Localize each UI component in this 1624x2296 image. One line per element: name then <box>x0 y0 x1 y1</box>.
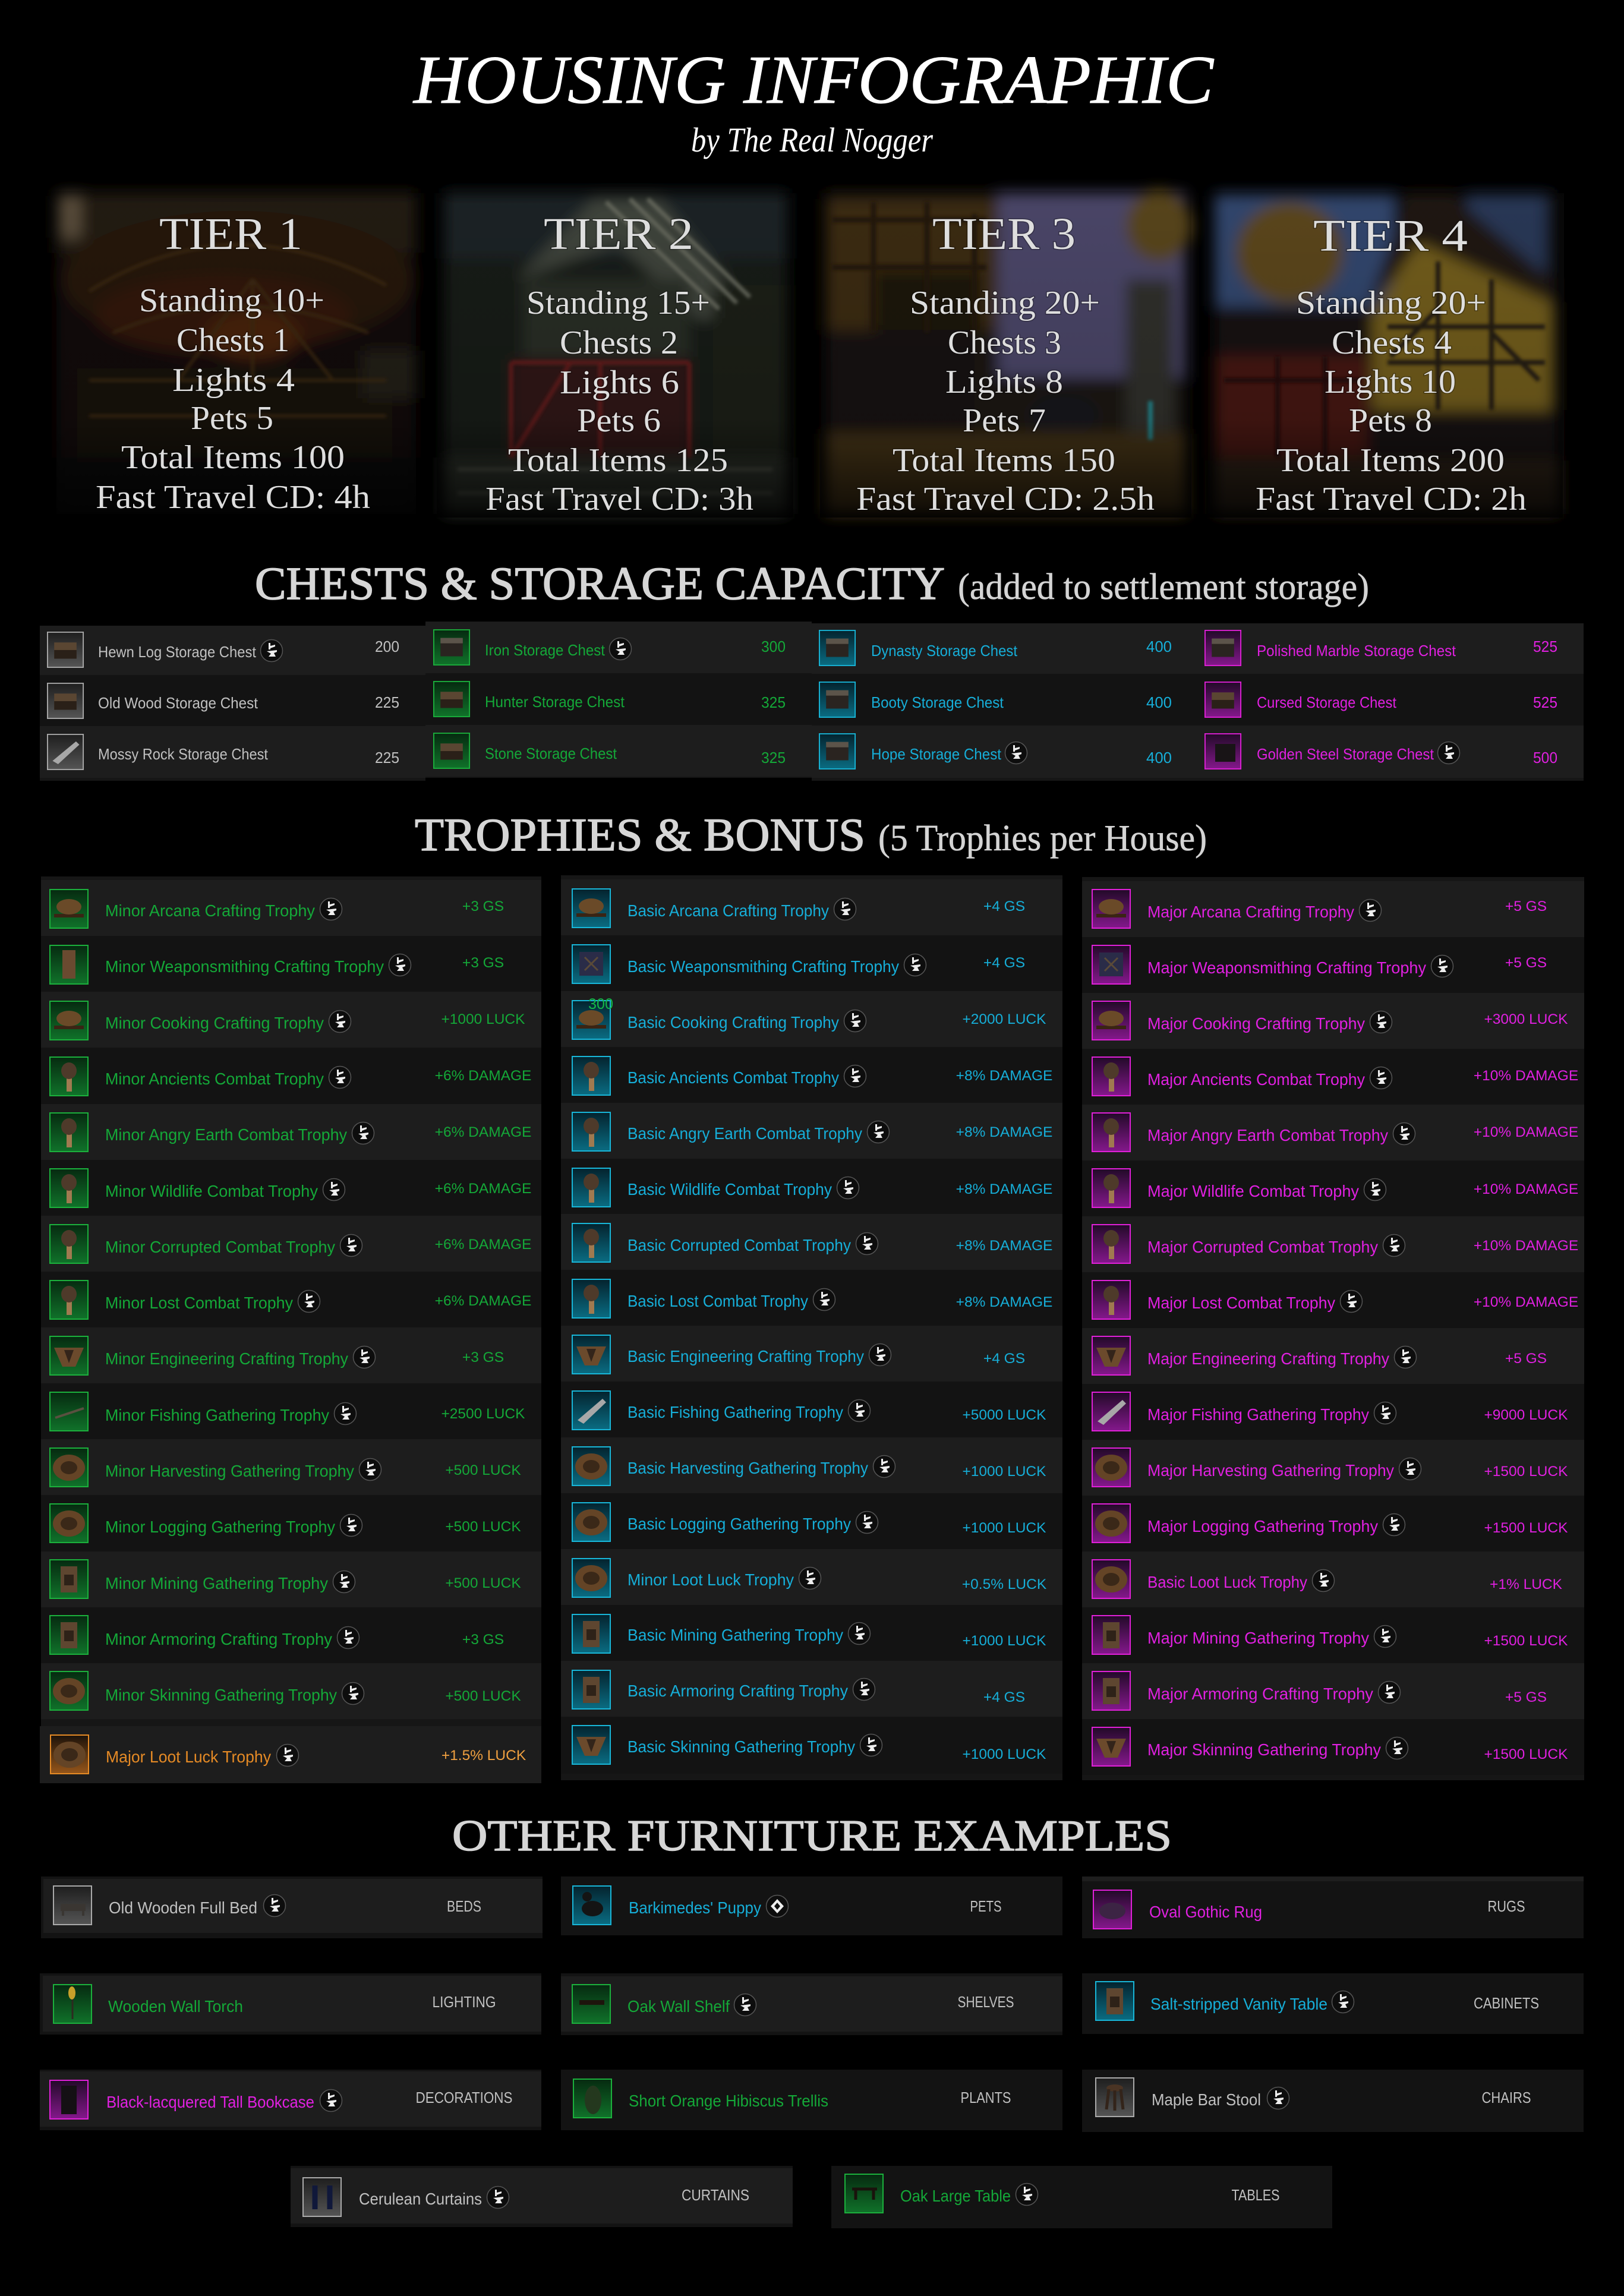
trophy: Minor Ancients <box>41 1048 541 1104</box>
trophy: Minor Wildlife: +6% DAMAGE <box>435 1181 531 1197</box>
tier 2 text <box>485 209 753 518</box>
trophy: Major Skinning: Major Skinning Gathering Trophy <box>1147 1740 1381 1759</box>
furniture: pets: PETS <box>970 1897 1002 1915</box>
tier 3 text: Fast Travel CD: 2.5h <box>856 481 1155 518</box>
heading: trophies and bonus <box>415 809 1207 860</box>
trophy: Basic Wildlife: Basic Wildlife Combat Trophy <box>627 1180 832 1199</box>
tier 2 text: Fast Travel CD: 3h <box>485 481 753 518</box>
trophy: Minor Corrupted: +6% DAMAGE <box>435 1237 531 1253</box>
trophy: Major Lost <box>1082 1272 1584 1328</box>
trophy: Major Logging: +1500 LUCK <box>1484 1520 1568 1536</box>
chest: Iron: 300 <box>761 638 786 655</box>
tier 2 text: Total Items 125 <box>508 442 728 479</box>
heading: trophies and bonus: TROPHIES & BONUS <box>415 809 865 860</box>
furniture: cabinets: Salt-stripped Vanity Table <box>1150 1995 1327 2013</box>
trophy: Minor Wildlife: Minor Wildlife Combat Trophy <box>105 1182 318 1200</box>
trophy: Basic Skinning <box>561 1717 1062 1774</box>
panel: epic chests <box>1197 623 1584 781</box>
trophy: Basic Ancients: +8% DAMAGE <box>956 1068 1052 1084</box>
chest: Polished Marble: Polished Marble Storage Chest <box>1257 642 1456 660</box>
trophy: Minor Lost <box>41 1272 541 1327</box>
trophy: Major Engineering: +5 GS <box>1505 1351 1547 1367</box>
furniture: rugs: Oval Gothic Rug <box>1149 1903 1262 1921</box>
trophy: Basic Weaponsmithing: +4 GS <box>983 955 1025 971</box>
trophy: Basic Engineering: +4 GS <box>983 1351 1025 1367</box>
trophy: Major Angry Earth: +10% DAMAGE <box>1474 1124 1578 1140</box>
furniture: pets: Barkimedes' Puppy <box>629 1898 761 1917</box>
chest: Polished Marble: 525 <box>1533 638 1557 655</box>
furniture: plants <box>561 2070 1062 2130</box>
trophy: Major Armoring <box>1082 1663 1584 1719</box>
trophy: Minor Ancients: +6% DAMAGE <box>435 1068 531 1084</box>
furniture: decorations <box>40 2070 541 2130</box>
trophy: Minor Armoring: +3 GS <box>462 1632 504 1648</box>
chest: Hunter: Hunter Storage Chest <box>485 693 625 711</box>
tier 3 text: Chests 3 <box>948 324 1061 361</box>
trophy: Major Angry Earth: Major Angry Earth Combat Trophy <box>1147 1126 1388 1144</box>
trophy: Minor Arcana: +3 GS <box>462 898 504 914</box>
panel: tier 4 <box>1206 191 1563 518</box>
trophy: Minor Fishing <box>41 1383 541 1439</box>
trophy: Major Mining <box>1082 1607 1584 1663</box>
tier 2 text: Lights 6 <box>560 364 679 401</box>
tier 4 text: Fast Travel CD: 2h <box>1256 481 1527 518</box>
trophy: Major Mining: +1500 LUCK <box>1484 1633 1568 1649</box>
trophy: Minor Logging <box>41 1495 541 1551</box>
chest: Golden Steel: 500 <box>1533 749 1557 767</box>
trophy: Minor Logging: Minor Logging Gathering Trophy <box>105 1518 335 1536</box>
chest: Cursed: 525 <box>1533 693 1557 711</box>
trophy: Major Engineering: Major Engineering Crafting Trophy <box>1147 1349 1389 1368</box>
chest: Stone: Stone Storage Chest <box>485 745 617 762</box>
trophy: Major Fishing: Major Fishing Gathering Trophy <box>1147 1405 1369 1424</box>
furniture: curtains: CURTAINS <box>682 2186 749 2204</box>
trophy: Basic Ancients <box>561 1047 1062 1103</box>
trophy: Major Angry Earth <box>1082 1105 1584 1160</box>
panel: uncommon chests <box>425 622 812 778</box>
furniture: cabinets: CABINETS <box>1474 1994 1539 2012</box>
trophy: Basic Lost <box>561 1270 1062 1326</box>
trophy: Basic Engineering <box>561 1326 1062 1382</box>
furniture: lighting <box>40 1973 541 2035</box>
panel: tier 3 <box>820 190 1191 518</box>
chest: Booty: 400 <box>1146 693 1172 711</box>
trophy: Major Arcana: +5 GS <box>1505 898 1547 914</box>
trophy: Minor Engineering: Minor Engineering Crafting Trophy <box>105 1349 348 1368</box>
chest: Hewn Log: Hewn Log Storage Chest <box>98 643 257 661</box>
trophy: Minor Angry Earth <box>41 1104 541 1160</box>
tier 2 text: Chests 2 <box>560 324 678 361</box>
tier 3 text: Pets 7 <box>963 402 1046 439</box>
tier 1 text: Fast Travel CD: 4h <box>96 479 370 516</box>
furniture: lighting: Wooden Wall Torch <box>108 1997 243 2016</box>
trophy: Major Corrupted <box>1082 1216 1584 1272</box>
trophy: Major Wildlife: +10% DAMAGE <box>1474 1181 1578 1197</box>
trophy: Major Wildlife: Major Wildlife Combat Trophy <box>1147 1182 1359 1200</box>
trophy: Basic Arcana: Basic Arcana Crafting Trophy <box>627 901 829 920</box>
furniture: beds <box>41 1876 543 1938</box>
trophy: Basic Logging: +1000 LUCK <box>963 1520 1046 1536</box>
trophy: Basic Logging <box>561 1493 1062 1549</box>
trophy: Basic Arcana <box>561 879 1062 935</box>
tier 4 text <box>1256 211 1527 518</box>
chest: Hewn Log <box>40 626 425 675</box>
trophy: Basic Engineering: Basic Engineering Crafting Trophy <box>627 1347 864 1365</box>
trophy: Basic Mining: Basic Mining Gathering Trophy <box>627 1626 843 1644</box>
chest: Hope: Hope Storage Chest <box>871 745 1002 763</box>
heading: chests and storage capacity <box>255 557 1369 609</box>
panel: minor trophies <box>40 876 541 1783</box>
trophy: Major Ancients: +10% DAMAGE <box>1474 1068 1578 1084</box>
tier 4 text: Total Items 200 <box>1276 442 1505 479</box>
trophy: Basic Corrupted: Basic Corrupted Combat Trophy <box>627 1236 851 1254</box>
chest: Dynasty: Dynasty Storage Chest <box>871 642 1018 660</box>
trophy: Minor Skinning <box>41 1663 541 1719</box>
chest: Golden Steel: Golden Steel Storage Chest <box>1257 745 1434 763</box>
trophy: Basic Ancients: Basic Ancients Combat Trophy <box>627 1068 839 1087</box>
trophy: Basic Skinning: Basic Skinning Gathering Trophy <box>627 1737 855 1756</box>
trophy: Basic Wildlife: +8% DAMAGE <box>956 1181 1052 1197</box>
furniture: pets <box>561 1876 1062 1935</box>
furniture: chairs: CHAIRS <box>1482 2089 1531 2106</box>
chest: Iron <box>425 622 812 673</box>
trophy: Minor Ancients: Minor Ancients Combat Trophy <box>105 1070 324 1088</box>
trophy: Minor Logging: +500 LUCK <box>445 1519 521 1535</box>
trophy: Major Fishing: +9000 LUCK <box>1484 1407 1568 1423</box>
chest: Old Wood: Old Wood Storage Chest <box>98 694 258 712</box>
furniture: chairs: Maple Bar Stool <box>1152 2090 1261 2109</box>
trophy: Basic Mining: +1000 LUCK <box>963 1633 1046 1649</box>
trophy: Minor Cooking <box>41 992 541 1048</box>
trophy: Major Skinning: +1500 LUCK <box>1484 1746 1568 1762</box>
chest: Cursed: Cursed Storage Chest <box>1257 693 1397 711</box>
trophy: Minor Loot Luck: Minor Loot Luck Trophy <box>627 1570 794 1589</box>
tier 4 text: Standing 20+ <box>1296 285 1486 321</box>
trophy: Major Wildlife <box>1082 1160 1584 1216</box>
panel: basic trophies <box>561 875 1062 1780</box>
furniture: rugs: RUGS <box>1488 1897 1525 1915</box>
chest: Polished Marble <box>1197 623 1584 674</box>
trophy: Basic Harvesting: Basic Harvesting Gathering Trophy <box>627 1459 868 1477</box>
chest: Hunter: 325 <box>761 693 786 711</box>
chest: Hope <box>812 726 1197 778</box>
heading: trophies and bonus: (5 Trophies per House) <box>878 818 1207 859</box>
trophy: Minor Arcana <box>41 880 541 936</box>
trophy: Basic Fishing: +5000 LUCK <box>963 1407 1046 1423</box>
trophy: Major Logging <box>1082 1496 1584 1551</box>
trophy: Basic Armoring: +4 GS <box>983 1689 1025 1705</box>
byline: by The Real Nogger <box>691 121 933 159</box>
tier 1 text: Lights 4 <box>172 362 295 399</box>
trophy: Minor Corrupted <box>41 1216 541 1272</box>
tier 3 text: Lights 8 <box>945 364 1063 400</box>
trophy: Minor Harvesting: +500 LUCK <box>445 1462 521 1478</box>
trophy: Basic Arcana: +4 GS <box>983 898 1025 914</box>
furniture: beds: Old Wooden Full Bed <box>109 1898 257 1917</box>
furniture: shelves: SHELVES <box>958 1993 1014 2011</box>
tier 1 text: TIER 1 <box>159 209 302 259</box>
trophy: Major Armoring: +5 GS <box>1505 1689 1547 1705</box>
trophy: Major Loot Luck <box>40 1726 541 1783</box>
chest: Mossy Rock <box>40 726 425 778</box>
panel: tier 2 <box>437 191 793 518</box>
furniture: plants: Short Orange Hibiscus Trellis <box>629 2092 828 2110</box>
furniture: chairs <box>1082 2070 1584 2132</box>
trophy: Major Harvesting <box>1082 1440 1584 1496</box>
trophy: Minor Skinning: Minor Skinning Gathering Trophy <box>105 1686 337 1704</box>
trophy: Major Arcana: Major Arcana Crafting Trophy <box>1147 903 1354 921</box>
trophy: Minor Harvesting <box>41 1439 541 1495</box>
trophy: Basic Angry Earth: Basic Angry Earth Combat Trophy <box>627 1124 862 1143</box>
trophy: Major Corrupted: +10% DAMAGE <box>1474 1238 1578 1254</box>
trophy: Minor Weaponsmithing <box>41 936 541 992</box>
trophy: Major Arcana <box>1082 881 1584 937</box>
tier 3 text: Total Items 150 <box>893 442 1115 479</box>
trophy: Major Armoring: Major Armoring Crafting Trophy <box>1147 1685 1373 1703</box>
trophy: Basic Logging: Basic Logging Gathering Trophy <box>627 1515 851 1533</box>
trophy: Major Ancients <box>1082 1049 1584 1105</box>
panel: tier 1 <box>48 191 422 518</box>
trophy: Basic Cooking: +2000 LUCK <box>963 1011 1046 1027</box>
tier 1 text: Standing 10+ <box>139 282 324 319</box>
trophy: Basic Wildlife <box>561 1159 1062 1214</box>
tier 4 text: Lights 10 <box>1325 364 1456 400</box>
trophy: Minor Angry Earth: Minor Angry Earth Combat Trophy <box>105 1125 347 1144</box>
trophy: Major Cooking <box>1082 993 1584 1049</box>
trophy: Major Weaponsmithing: +5 GS <box>1505 955 1547 971</box>
trophy: Basic Corrupted <box>561 1214 1062 1270</box>
furniture: beds: BEDS <box>447 1897 481 1915</box>
chest: Booty <box>812 674 1197 726</box>
trophy: Minor Fishing: Minor Fishing Gathering Trophy <box>105 1406 329 1424</box>
trophy: Major Loot Luck: +1.5% LUCK <box>442 1748 526 1764</box>
trophy: Major Lost: +10% DAMAGE <box>1474 1294 1578 1310</box>
tier 3 text: TIER 3 <box>932 209 1076 259</box>
chest: Hunter <box>425 673 812 725</box>
trophy: Major Harvesting: +1500 LUCK <box>1484 1464 1568 1480</box>
tier 1 text: Chests 1 <box>176 322 289 359</box>
trophy: Basic Fishing <box>561 1382 1062 1437</box>
stray label: 300: 300 <box>588 996 613 1013</box>
trophy: Minor Cooking: Minor Cooking Crafting Trophy <box>105 1014 324 1032</box>
chest: Old Wood: 225 <box>375 693 399 711</box>
trophy: Basic Angry Earth <box>561 1103 1062 1159</box>
tier 2 text: TIER 2 <box>544 209 693 259</box>
trophy: Basic Angry Earth: +8% DAMAGE <box>956 1124 1052 1140</box>
heading: chests and storage capacity: (added to settlement storage) <box>958 567 1369 607</box>
furniture: tables: TABLES <box>1231 2186 1280 2204</box>
panel: rare chests <box>812 623 1197 781</box>
chest: Booty: Booty Storage Chest <box>871 693 1004 711</box>
chest: Stone <box>425 725 812 777</box>
furniture: plants: PLANTS <box>960 2089 1011 2106</box>
trophy: Minor Engineering: +3 GS <box>462 1349 504 1365</box>
trophy: Major Mining: Major Mining Gathering Trophy <box>1147 1629 1369 1647</box>
trophy: Minor Engineering <box>41 1327 541 1383</box>
trophy: Major Logging: Major Logging Gathering Trophy <box>1147 1517 1378 1535</box>
trophy: Major Lost: Major Lost Combat Trophy <box>1147 1294 1335 1312</box>
furniture: shelves <box>561 1973 1062 2035</box>
chest: Dynasty <box>812 623 1197 674</box>
chest: Mossy Rock: Mossy Rock Storage Chest <box>98 745 269 763</box>
trophy: Major Weaponsmithing: Major Weaponsmithing Crafting Trophy <box>1147 958 1426 977</box>
trophy: Major Ancients: Major Ancients Combat Trophy <box>1147 1070 1365 1089</box>
trophy: Minor Loot Luck: +0.5% LUCK <box>962 1576 1047 1592</box>
trophy: Major Loot Luck: Major Loot Luck Trophy <box>106 1748 271 1766</box>
trophy: Basic Fishing: Basic Fishing Gathering Trophy <box>627 1403 843 1421</box>
trophy: Major Harvesting: Major Harvesting Gathering Trophy <box>1147 1461 1394 1480</box>
tier 4 text: TIER 4 <box>1313 211 1468 261</box>
trophy: Basic Harvesting <box>561 1437 1062 1493</box>
trophy: Minor Weaponsmithing: +3 GS <box>462 955 504 971</box>
trophy: Basic Weaponsmithing <box>561 935 1062 991</box>
trophy: Minor Loot Luck <box>561 1549 1062 1605</box>
trophy: Major Skinning <box>1082 1719 1584 1775</box>
chest: Dynasty: 400 <box>1146 638 1172 655</box>
tier 4 text: Pets 8 <box>1349 402 1432 439</box>
tier 3 text: Standing 20+ <box>910 285 1100 321</box>
furniture: tables <box>831 2166 1332 2228</box>
panel: common chests <box>40 626 425 781</box>
tier 2 text: Standing 15+ <box>526 285 710 321</box>
trophy: Minor Angry Earth: +6% DAMAGE <box>435 1124 531 1140</box>
panel: major trophies <box>1082 877 1584 1780</box>
trophy: Basic Skinning: +1000 LUCK <box>963 1746 1046 1762</box>
furniture: lighting: LIGHTING <box>433 1993 496 2011</box>
furniture: curtains: Cerulean Curtains <box>359 2190 482 2208</box>
trophy: Basic Lost: +8% DAMAGE <box>956 1294 1052 1310</box>
trophy: Minor Wildlife <box>41 1160 541 1216</box>
trophy: Minor Harvesting: Minor Harvesting Gathering Trophy <box>105 1462 354 1480</box>
trophy: Minor Armoring: Minor Armoring Crafting Trophy <box>105 1630 332 1648</box>
trophy: Major Cooking: Major Cooking Crafting Trophy <box>1147 1014 1365 1033</box>
chest: Mossy Rock: 225 <box>375 749 399 767</box>
trophy: Minor Corrupted: Minor Corrupted Combat Trophy <box>105 1238 335 1256</box>
tier 1 text <box>96 209 370 516</box>
trophy: Minor Fishing: +2500 LUCK <box>442 1406 525 1422</box>
trophy: Basic Lost: Basic Lost Combat Trophy <box>627 1292 808 1310</box>
trophy: Minor Mining <box>41 1551 541 1607</box>
trophy: Major Engineering <box>1082 1328 1584 1384</box>
chest: Cursed <box>1197 674 1584 726</box>
heading: other furniture examples: OTHER FURNITURE EXAMPLES <box>452 1812 1172 1860</box>
trophy: Basic Mining <box>561 1605 1062 1661</box>
trophy: Major Fishing <box>1082 1384 1584 1440</box>
trophy: Minor Mining: +500 LUCK <box>445 1575 521 1591</box>
tier 1 text: Total Items 100 <box>121 439 345 476</box>
tier 4 text: Chests 4 <box>1332 324 1452 361</box>
trophy: Basic Corrupted: +8% DAMAGE <box>956 1238 1052 1254</box>
trophy: Minor Armoring <box>41 1607 541 1663</box>
trophy: Major Corrupted: Major Corrupted Combat Trophy <box>1147 1238 1378 1256</box>
furniture: rugs <box>1082 1876 1584 1938</box>
furniture: decorations: DECORATIONS <box>416 2089 512 2106</box>
trophy: Basic Loot Luck: Basic Loot Luck Trophy <box>1147 1573 1307 1591</box>
trophy: Basic Cooking <box>561 991 1062 1047</box>
chest: Old Wood <box>40 675 425 726</box>
trophy: Basic Loot Luck <box>1082 1551 1584 1607</box>
trophy: Basic Loot Luck: +1% LUCK <box>1490 1576 1563 1592</box>
trophy: Minor Lost: Minor Lost Combat Trophy <box>105 1294 293 1312</box>
chest: Golden Steel <box>1197 726 1584 778</box>
trophy: Basic Cooking: Basic Cooking Crafting Trophy <box>627 1013 839 1032</box>
trophy: Minor Arcana: Minor Arcana Crafting Trophy <box>105 901 315 920</box>
trophy: Basic Harvesting: +1000 LUCK <box>963 1464 1046 1480</box>
furniture: curtains <box>291 2166 793 2227</box>
trophy: Minor Weaponsmithing: Minor Weaponsmithing Crafting Trophy <box>105 957 384 976</box>
chest: Iron: Iron Storage Chest <box>485 641 606 659</box>
chest: Stone: 325 <box>761 749 786 767</box>
tier 3 text <box>856 209 1155 518</box>
title: HOUSING INFOGRAPHIC <box>412 42 1214 118</box>
chest: Hope: 400 <box>1146 749 1172 767</box>
trophy: Major Cooking: +3000 LUCK <box>1484 1011 1568 1027</box>
tier 2 text: Pets 6 <box>577 402 661 439</box>
tier 1 text: Pets 5 <box>191 400 273 437</box>
trophy: Minor Lost: +6% DAMAGE <box>435 1293 531 1309</box>
furniture: decorations: Black-lacquered Tall Bookcase <box>106 2093 314 2111</box>
trophy: Basic Armoring: Basic Armoring Crafting Trophy <box>627 1682 848 1700</box>
trophy: Basic Armoring <box>561 1661 1062 1717</box>
trophy: Major Weaponsmithing <box>1082 937 1584 993</box>
furniture: tables: Oak Large Table <box>900 2187 1011 2205</box>
chest: Hewn Log: 200 <box>375 638 399 655</box>
furniture: cabinets <box>1082 1973 1584 2034</box>
heading: chests and storage capacity: CHESTS & STORAGE CAPACITY <box>255 557 945 609</box>
trophy: Minor Mining: Minor Mining Gathering Trophy <box>105 1574 328 1592</box>
trophy: Basic Weaponsmithing: Basic Weaponsmithing Crafting Trophy <box>627 957 899 976</box>
trophy: Minor Skinning: +500 LUCK <box>445 1688 521 1704</box>
trophy: Minor Cooking: +1000 LUCK <box>442 1011 525 1027</box>
furniture: shelves: Oak Wall Shelf <box>627 1997 730 2016</box>
